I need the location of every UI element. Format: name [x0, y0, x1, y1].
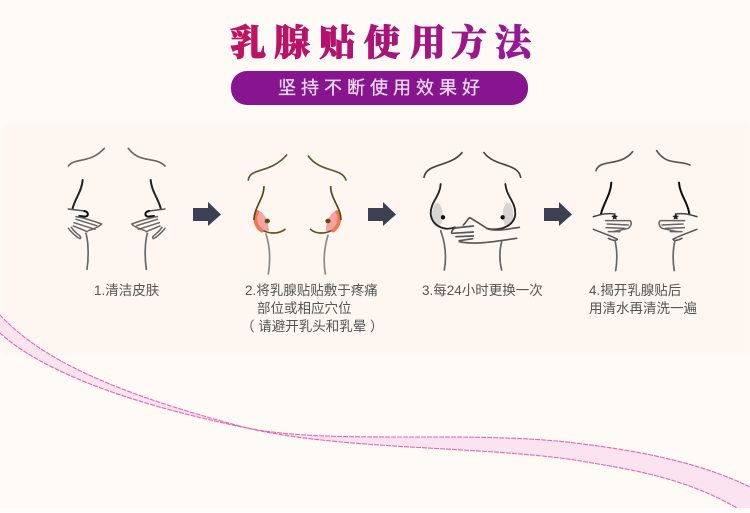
- step 4 label: 用清水再清洗一遍: [589, 301, 697, 316]
- arm and hand: [452, 218, 519, 243]
- step 2 label: [241, 282, 384, 334]
- step 2 figure: [248, 155, 346, 274]
- step 4 figure: [593, 151, 697, 271]
- step 1 figure: [68, 148, 165, 269]
- adhesive patch left: [255, 210, 269, 232]
- subtitle pill: [231, 71, 528, 105]
- arrow 2: [368, 202, 396, 226]
- step 1 label: 1.清洁皮肤: [94, 283, 160, 298]
- step 2 label: 部位或相应穴位: [257, 300, 352, 316]
- step 3 label: 3.每24小时更换一次: [422, 283, 543, 298]
- arrow 3: [544, 202, 572, 226]
- step 2 label: （ 请避开乳头和乳晕 ）: [241, 319, 384, 334]
- step 2 label: 2.将乳腺贴贴敷于疼痛: [245, 282, 378, 298]
- step 4 label: [589, 283, 697, 316]
- step 4 label: 4.揭开乳腺贴后: [589, 283, 681, 298]
- arrow 1: [193, 202, 221, 226]
- adhesive patch right: [326, 210, 339, 232]
- title: 乳腺贴使用方法: [230, 15, 535, 66]
- panel: steps background: [4, 125, 750, 353]
- decorative ribbon: [0, 315, 750, 508]
- bottom strip: [0, 508, 750, 513]
- subtitle text: 坚持不断使用效果好: [278, 78, 485, 98]
- step 3 figure: [424, 153, 521, 270]
